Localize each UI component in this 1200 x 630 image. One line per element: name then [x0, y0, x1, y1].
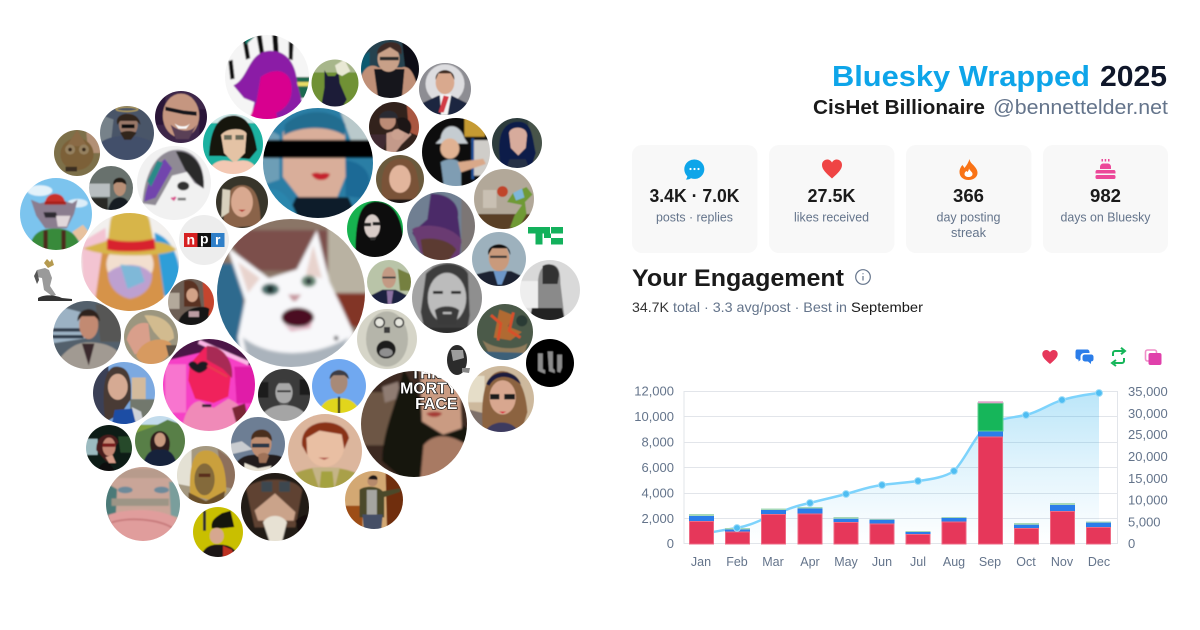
icon: legend heart — [1042, 350, 1058, 364]
avatar: hooded tan mask — [176, 445, 236, 505]
avatar: purple hair piano — [223, 33, 311, 121]
icon: legend reposts — [1112, 348, 1125, 366]
panel: posts and replies stat: 3.4K · 7.0K — [650, 186, 740, 206]
panel: posts and replies stat — [632, 145, 758, 253]
y axis left labels: 6,000 — [641, 460, 674, 475]
month labels: Jun — [872, 555, 892, 569]
avatar: woman hugging cat — [124, 310, 178, 364]
avatar: this is morty face — [358, 365, 470, 480]
avatar: W logo black — [525, 338, 575, 388]
icon: chat bubble — [684, 159, 704, 180]
month labels: Nov — [1051, 555, 1074, 569]
avatar: this is morty face: THIS — [411, 365, 446, 382]
engagement summary: total · 3.3 avg/post · Best in — [673, 299, 847, 315]
avatar: kermit with mask and tea — [474, 169, 534, 229]
avatar: dark blue hair woman — [492, 118, 542, 168]
y axis right labels: 25,000 — [1128, 427, 1168, 442]
panel: likes stat — [769, 145, 894, 253]
avatar: emperor in hood on green — [347, 201, 403, 257]
avatar: purple scribble hair — [135, 144, 213, 222]
avatar: man in tweed jacket — [53, 301, 121, 369]
month labels: Mar — [762, 555, 784, 569]
panel: days on Bluesky stat: 982 — [1090, 186, 1121, 206]
month labels: Apr — [800, 555, 820, 569]
month labels: Dec — [1088, 555, 1110, 569]
engagement summary — [632, 299, 923, 315]
icon: heart — [822, 160, 842, 178]
logo: TechCrunch — [528, 227, 563, 244]
panel: posting streak stat — [906, 145, 1032, 253]
chart legend — [1042, 348, 1162, 366]
icon: legend replies — [1076, 350, 1094, 364]
avatar: npr logo: r — [215, 231, 221, 247]
avatar: wild thing with crown — [34, 259, 72, 301]
y axis left labels: 12,000 — [634, 384, 674, 398]
icon: legend quotes — [1146, 350, 1162, 365]
panel: days on Bluesky stat — [1043, 145, 1168, 253]
y axis left labels: 8,000 — [641, 434, 674, 450]
month labels: May — [834, 555, 859, 569]
avatar: straw hat girl with mask — [81, 213, 179, 311]
avatar: woman in dark tee — [167, 278, 215, 326]
avatar: couple dark photo — [369, 102, 419, 152]
avatar: boy with hat and glasses — [420, 116, 492, 188]
y axis right labels: 0 — [1128, 536, 1135, 551]
panel: days on Bluesky stat: days on Bluesky — [1060, 210, 1151, 224]
avatar: woman with blonde hair — [215, 175, 269, 229]
avatar: man standing by door — [344, 470, 404, 530]
y axis right labels — [1128, 384, 1168, 551]
avatar bubble cluster — [18, 33, 581, 558]
avatar: suit and red tie man — [419, 63, 471, 115]
avatar: red haired boy — [288, 414, 362, 488]
handle: @bennettelder.net — [993, 97, 1168, 119]
icon: birthday cake — [1096, 159, 1116, 179]
month labels: Jul — [910, 555, 926, 569]
chart: engagement by month — [634, 384, 1168, 569]
display name: CisHet Billionaire — [813, 97, 985, 119]
avatar: woman mountains — [134, 415, 186, 467]
month labels: Jan — [691, 555, 711, 569]
cumulative dots — [734, 390, 1102, 531]
title: Bluesky Wrapped — [832, 61, 1090, 93]
avatar: man with sunglasses on hand — [230, 416, 286, 472]
heading: your engagement: Your Engagement — [632, 265, 844, 292]
title year: 2025 — [1100, 61, 1167, 93]
avatar: yellow cowboy — [192, 506, 244, 558]
avatar: bw man with glasses — [258, 369, 310, 421]
engagement summary: September — [851, 299, 923, 315]
avatar: smiling bearded man glasses — [154, 90, 208, 144]
month labels: Sep — [979, 555, 1001, 569]
y axis right labels: 30,000 — [1128, 406, 1168, 421]
month labels: Oct — [1016, 555, 1036, 569]
month labels — [691, 555, 1110, 569]
cumulative line — [701, 393, 1099, 534]
avatar: grumpy cat glasses — [239, 471, 311, 543]
avatar: kronk sunglasses — [202, 112, 264, 176]
month labels: Aug — [943, 555, 965, 569]
avatar: this is morty face: FACE — [415, 396, 457, 413]
avatar: woman glasses headband — [466, 364, 536, 434]
month labels: Feb — [726, 555, 748, 569]
avatar: blue hair with black bar — [260, 105, 376, 221]
avatar: man in tank top — [361, 40, 419, 98]
icon: info — [856, 270, 870, 284]
avatar: bw bearded man — [412, 263, 482, 333]
avatar: woman red sunglasses — [85, 424, 133, 472]
y axis right labels: 15,000 — [1128, 471, 1168, 486]
panel: likes stat: 27.5K — [808, 186, 856, 206]
avatar: raccoon with red hat — [18, 176, 94, 252]
avatar: dragon art — [476, 303, 534, 361]
avatar: npr logo: p — [200, 230, 209, 246]
stacked bars — [689, 401, 1111, 544]
y axis right labels: 5,000 — [1128, 514, 1161, 530]
avatar: owl sculpture — [53, 129, 101, 177]
avatar: smiling woman blue sky — [91, 360, 157, 426]
avatar: this is morty face: MORTY — [400, 380, 458, 397]
avatar: big white cat — [213, 215, 369, 371]
avatar: asian man with glasses — [472, 232, 526, 286]
y axis right labels: 20,000 — [1128, 449, 1168, 464]
panel: likes stat: likes received — [794, 210, 869, 224]
avatar: pink neon man heart sunglasses — [161, 337, 257, 433]
y axis left labels: 0 — [667, 536, 674, 551]
y axis left labels — [634, 384, 674, 551]
avatar: black cat in grass — [310, 58, 360, 108]
panel: posting streak stat: day posting — [936, 210, 1001, 224]
avatar: man yellow jacket blue sky — [311, 358, 367, 414]
avatar: black and white long hair — [518, 258, 582, 322]
panel: posting streak stat: streak — [951, 226, 987, 240]
icon: flame — [960, 159, 978, 180]
avatar: bald man in suit — [367, 260, 411, 304]
avatar: bearded man with halo — [100, 106, 154, 160]
avatar: man by car — [88, 165, 134, 211]
avatar: purple gorilla — [405, 190, 477, 262]
y axis left labels: 10,000 — [634, 409, 674, 424]
y axis right labels: 35,000 — [1128, 384, 1168, 399]
panel: posting streak stat: 366 — [953, 186, 984, 206]
avatar: npr logo: n — [186, 231, 195, 247]
avatar: eyes over hand — [104, 465, 182, 543]
y axis left labels: 2,000 — [641, 511, 674, 526]
avatar: smiling woman brown hair — [376, 155, 424, 203]
avatar: small dark sketch — [447, 345, 470, 375]
cumulative area — [701, 393, 1099, 544]
avatar: bw screaming face — [356, 308, 418, 370]
engagement summary: 34.7K — [632, 299, 670, 315]
panel: posts and replies stat: posts · replies — [656, 210, 733, 224]
avatar: npr logo — [178, 214, 230, 266]
y axis left labels: 4,000 — [641, 486, 674, 500]
y axis right labels: 10,000 — [1128, 492, 1168, 508]
